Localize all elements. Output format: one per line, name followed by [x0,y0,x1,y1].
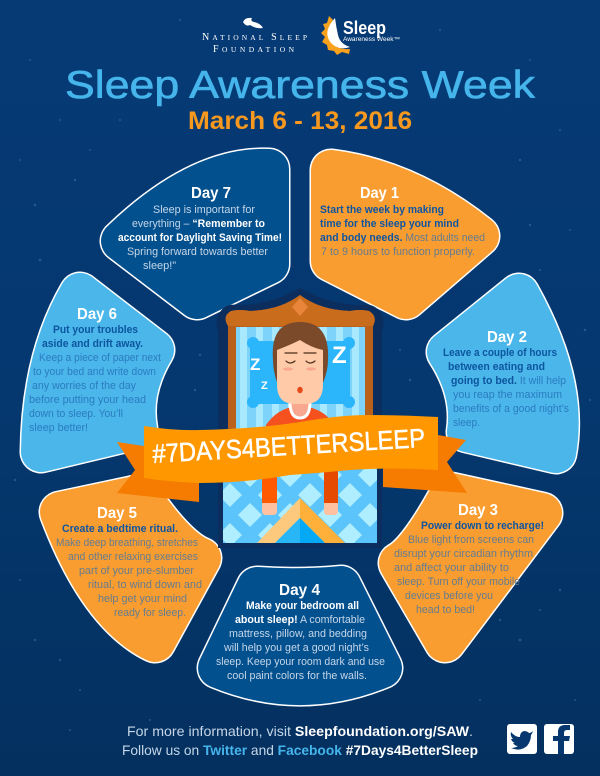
day 7 heading: Day 7 [191,185,231,202]
day 1 text: time for the sleep your mind [320,218,459,230]
day 6 text: Keep a piece of paper next [39,352,161,364]
date subtitle: March 6 - 13, 2016 [188,107,412,135]
ribbon: hashtag banner [117,415,467,502]
panel: day 3 [394,493,544,642]
footer text [122,724,478,758]
panel: day 1 [320,170,485,299]
title: Sleep Awareness Week [65,64,536,107]
headboard [226,295,375,435]
panel: day 2 [443,294,569,453]
day 5 text: ready for sleep. [114,607,186,619]
blanket fold [257,498,345,543]
day 1 text: Start the week by making [320,204,444,216]
icon: twitter [507,724,537,754]
footer text: For more information, visit Sleepfoundation.org/SAW . [127,724,473,739]
day 6 text: aside and drift away. [42,338,143,350]
day 3 text: Blue light from screens can [408,534,534,546]
day 3 text: Power down to recharge! [421,520,544,532]
arms [262,465,338,515]
day 2 text: Leave a couple of hours [443,347,557,359]
day 5 text: help get your mind [98,593,187,605]
day 4 text [216,600,385,682]
day 3 text: devices before you [405,590,493,602]
day 4 text: about sleep! A comfortable [235,614,365,626]
logo wordmark [343,18,400,43]
ribbon text: #7DAYS4BETTERSLEEP [152,423,426,469]
day 5 text: and other relaxing exercises [68,551,198,563]
organisation name: N ATIONAL S LEEP [202,32,307,43]
blanket [223,465,377,543]
illustration: sleeping person in bed [216,288,384,548]
day 6 text [29,324,161,434]
day 5 text: part of your pre-slumber [79,565,194,577]
day 3 text: head to bed! [416,604,475,616]
ribbon body [144,415,438,483]
day 2 text: going to bed. It will help [451,375,566,387]
day 1 heading: Day 1 [360,185,399,202]
closed eyes and brows [285,353,316,363]
pillow [247,337,355,408]
day 7 text: everything – “Remember to [132,218,266,230]
day 7 text [118,204,282,272]
logo: National Sleep Foundation [202,18,307,55]
day 4 text: Make your bedroom all [246,600,359,612]
snoring letters: Z [250,355,260,374]
mattress stripes [236,327,365,432]
panel: day 5 [56,495,202,642]
torso [266,408,332,470]
day 4 text: cool paint colors for the walls. [227,670,367,682]
day 7 text: Spring forward towards better [127,246,268,258]
panel: day 7 [118,169,282,299]
footer text: Follow us on Twitter and Facebook #7Days4BetterSleep [122,743,478,758]
day 2 text: benefits of a good night’s [453,403,569,415]
icon: facebook [544,724,574,754]
day 1 text: and body needs. Most adults need [320,232,485,244]
day 5 text: Create a bedtime ritual. [62,523,178,535]
day 5 text: ritual, to wind down and [88,579,202,591]
snoring letters [250,342,347,392]
day 6 text: before putting your head [29,394,146,406]
ribbon right tail [383,435,467,493]
bed dark outline [216,288,384,548]
icon: sleeping figure [243,18,263,28]
hair fringe [275,323,326,350]
day 3 text: and affect your ability to [394,562,509,574]
day 4 text: mattress, pillow, and bedding [229,628,367,640]
day 4 text: sleep. Keep your room dark and use [216,656,385,668]
snoring letters: Z [332,342,347,369]
hair back [273,322,328,385]
day 6 text: down to sleep. You’ll [29,408,123,420]
day 2 text: between eating and [448,361,545,373]
face [277,340,323,404]
day 5 heading: Day 5 [97,505,137,522]
day 3 text: disrupt your circadian rhythm [394,548,533,560]
logo: Sleep Awareness Week [321,16,400,55]
day 6 heading: Day 6 [77,306,117,323]
snoring letters: Z [261,380,268,392]
ribbon left tail [117,442,199,502]
day 2 text [443,347,569,429]
day 4 text: will help you get a good night’s [223,642,369,654]
cheeks [283,367,316,371]
day 7 text: account for Daylight Saving Time! [118,232,282,244]
day 3 text [394,520,544,616]
day 6 text: sleep better! [29,422,88,434]
day 7 text: sleep!” [143,260,176,272]
icon: sun rays [321,16,350,55]
headboard ornament [292,298,308,316]
day 5 text [56,523,202,619]
day 1 text: 7 to 9 hours to function properly. [321,246,475,258]
headboard top highlight [226,295,375,326]
day 7 text: Sleep is important for [153,204,255,216]
mouth [297,387,303,393]
icon: crescent moon [327,18,350,48]
day 6 text: Put your troubles [53,324,138,336]
day 6 text: any worries of the day [32,380,137,392]
panel: day 4 [216,582,385,685]
logo wordmark: Sleep [343,18,386,38]
day 3 text: sleep. Turn off your mobile [397,576,520,588]
organisation name [202,32,307,55]
day 4 heading: Day 4 [279,582,320,599]
day 2 heading: Day 2 [487,329,527,346]
logo wordmark: Awareness Week™ [343,36,400,43]
collar [290,402,310,418]
day 5 text: Make deep breathing, stretches [56,537,198,549]
day 2 text: sleep. [453,417,480,429]
organisation name: F OUNDATION [213,44,295,55]
day 6 text: to your bed and write down [33,366,156,378]
panel: day 6 [29,293,161,452]
day 2 text: you reap the maximum [453,389,562,401]
day 3 heading: Day 3 [458,502,498,519]
day 1 text [320,204,485,258]
